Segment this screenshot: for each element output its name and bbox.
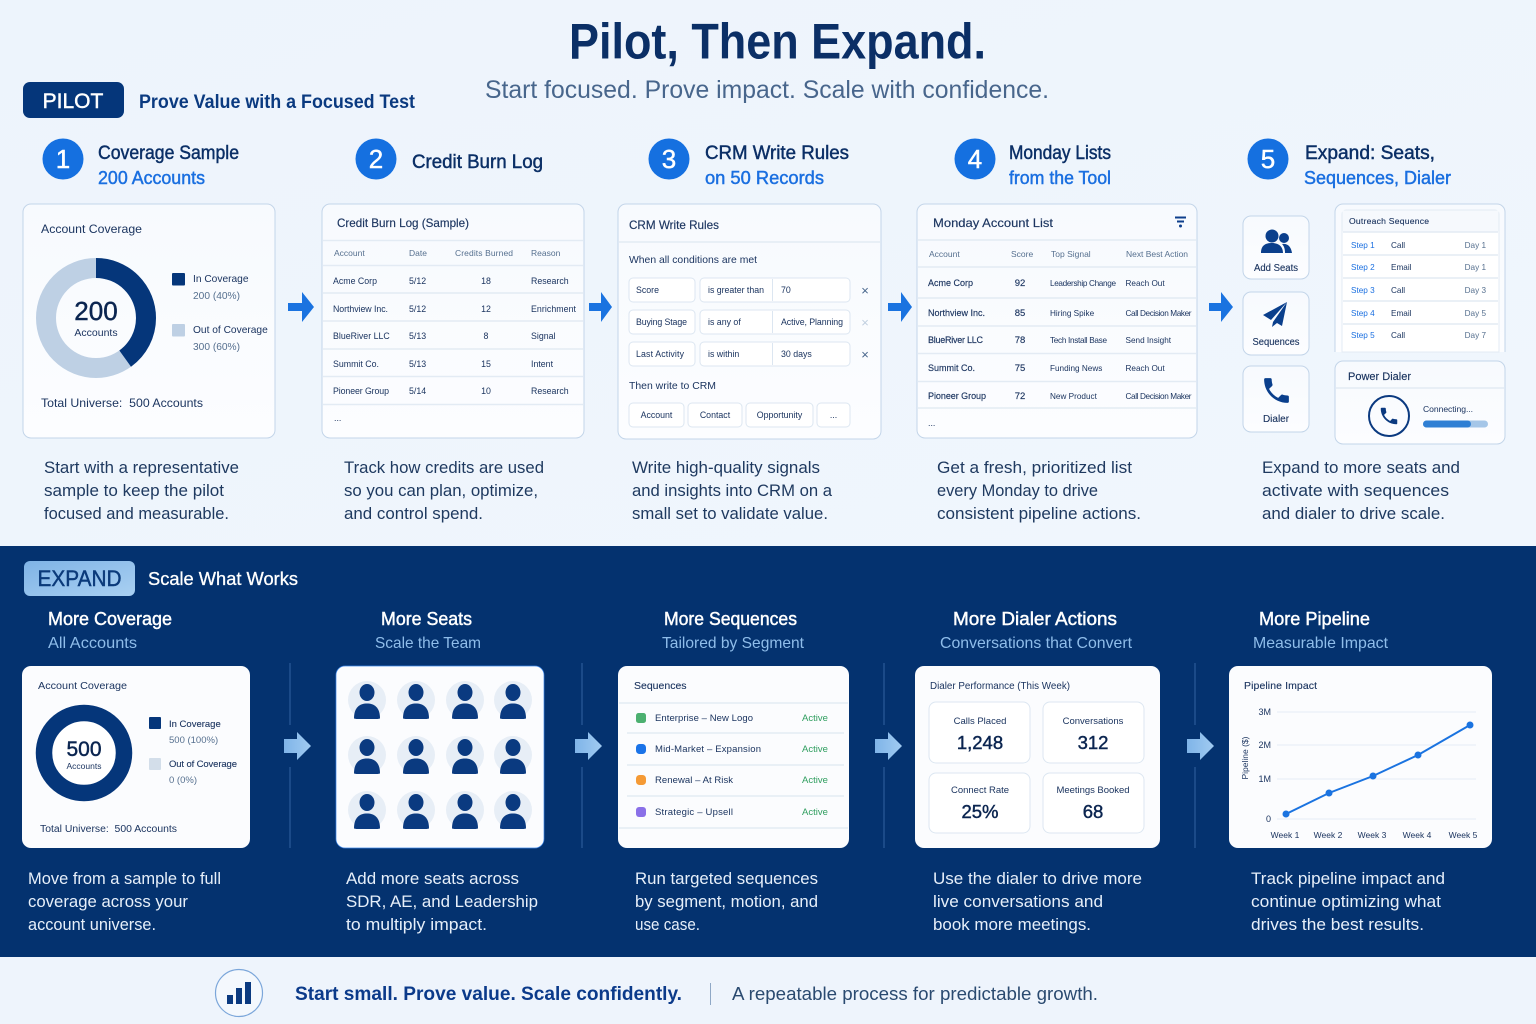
stat tile: conversations: Conversations xyxy=(1063,716,1124,727)
donut chart: 200 of 500 xyxy=(46,268,146,368)
panel: CRM write rules: Then write to CRM xyxy=(629,380,716,392)
text: step 1 description: focused and measurable. xyxy=(44,505,229,523)
panel: sequences list: Renewal – At Risk xyxy=(655,775,733,786)
panel: credit burn log table: Northview Inc. xyxy=(333,304,388,314)
column heading: more seats: More Seats xyxy=(381,608,472,629)
panel: seats grid xyxy=(336,666,544,848)
panel: power dialer: Connecting... xyxy=(1423,404,1473,414)
panel: credit burn log table: ... xyxy=(334,413,341,423)
panel: credit burn log table: 5/14 xyxy=(409,386,426,396)
line chart: Week 3 xyxy=(1358,830,1387,840)
column heading: more seats: Scale the Team xyxy=(375,635,481,652)
panel: credit burn log table: 5/13 xyxy=(409,359,426,369)
panel: Monday account list: Score xyxy=(1011,249,1033,259)
write target buttons: Opportunity xyxy=(757,410,803,420)
text: more dialer description: Use the dialer to drive more xyxy=(933,870,1142,888)
stat tile: connect rate xyxy=(929,773,1030,833)
card: add seats: Add Seats xyxy=(1254,263,1298,274)
panel: credit burn log table: 15 xyxy=(481,359,491,369)
expand section header: Scale What Works xyxy=(148,569,298,589)
arrow: expand 4 xyxy=(1187,732,1214,760)
legend: 500 (100%) xyxy=(169,735,218,746)
text: step 4 description: Get a fresh, prioritized list xyxy=(937,459,1132,477)
text: step 3 description xyxy=(632,459,833,523)
text: more pipeline description: drives the best results. xyxy=(1251,916,1424,934)
condition rows: × xyxy=(861,283,869,298)
stat tile: calls placed: 1,248 xyxy=(957,732,1003,753)
text: step 5 description xyxy=(1262,459,1460,523)
panel: credit burn log table: 5/13 xyxy=(409,331,426,341)
panel: credit burn log table: Intent xyxy=(531,359,554,369)
step 4 heading: Monday Lists xyxy=(1009,143,1111,164)
panel: Monday account list: Call Decision Maker xyxy=(1126,309,1192,318)
step 4 heading: 4 xyxy=(968,144,982,174)
text: more dialer description xyxy=(933,870,1142,934)
panel: pipeline impact: Pipeline Impact xyxy=(1244,680,1317,692)
text: more dialer description: book more meetings. xyxy=(933,916,1091,934)
text: more seats description: to multiply impact. xyxy=(346,916,487,934)
write target buttons: ... xyxy=(830,410,837,420)
column heading: more pipeline xyxy=(1253,608,1389,652)
step 3 heading: on 50 Records xyxy=(705,168,824,188)
panel: outreach sequence: Step 3 xyxy=(1351,286,1375,295)
column heading: more pipeline: Measurable Impact xyxy=(1253,635,1389,652)
panel: dialer performance: Dialer Performance (This Week) xyxy=(930,681,1070,692)
panel: credit burn log table: Reason xyxy=(531,248,561,258)
text: step 5 description: Expand to more seats and xyxy=(1262,459,1460,477)
legend: Out of Coverage xyxy=(193,325,268,336)
panel: outreach sequence: Call xyxy=(1391,241,1405,250)
panel: credit burn log table: 12 xyxy=(481,304,491,314)
footer tagline: Start small. Prove value. Scale confidently. xyxy=(295,983,682,1005)
text: more sequences description: Run targeted sequences xyxy=(635,870,818,888)
arrow: expand 2 xyxy=(575,732,602,760)
condition rows: is within xyxy=(708,349,739,359)
step 5 heading xyxy=(1248,138,1451,188)
panel: credit burn log table: 10 xyxy=(481,386,491,396)
arrow: expand 1 xyxy=(284,732,311,760)
panel: credit burn log table: Credits Burned xyxy=(455,248,513,258)
panel: outreach sequence: Step 4 xyxy=(1351,309,1375,318)
step 1 heading: 200 Accounts xyxy=(98,168,205,188)
panel: Monday account list: Tech Install Base xyxy=(1050,336,1107,345)
donut chart: 500 of 500: 500 xyxy=(66,738,102,761)
panel: full account coverage: Account Coverage xyxy=(38,681,127,692)
panel: Monday account list: BlueRiver LLC xyxy=(928,335,984,345)
panel: full account coverage xyxy=(22,666,250,848)
step 5 heading: 5 xyxy=(1261,144,1275,174)
text: more pipeline description xyxy=(1251,870,1445,934)
panel: outreach sequence: Day 7 xyxy=(1465,331,1486,340)
column heading: more seats xyxy=(375,608,481,652)
line chart: 3M xyxy=(1258,707,1271,717)
panel: power dialer xyxy=(1335,361,1505,444)
stat tile: calls placed xyxy=(929,702,1030,763)
text: step 2 description: and control spend. xyxy=(344,505,483,523)
panel: Monday account list: 72 xyxy=(1015,391,1025,402)
text: more coverage description: Move from a sample to full xyxy=(28,870,221,888)
column heading: more coverage: More Coverage xyxy=(48,608,172,629)
subtitle: Start focused. Prove impact. Scale with confidence. xyxy=(485,76,1049,104)
step 3 heading xyxy=(648,138,849,188)
legend: Out of Coverage xyxy=(169,759,237,770)
line chart: 2M xyxy=(1258,740,1271,750)
text: more seats description xyxy=(346,870,538,934)
panel: dialer performance xyxy=(915,666,1160,848)
pilot section header xyxy=(23,82,416,118)
text: step 4 description: consistent pipeline actions. xyxy=(937,505,1141,523)
legend: 0 (0%) xyxy=(169,775,197,786)
arrow 2 xyxy=(589,292,612,322)
text: step 4 description xyxy=(937,459,1141,523)
text: step 5 description: activate with sequences xyxy=(1262,482,1449,500)
text: more seats description: SDR, AE, and Leadership xyxy=(346,893,538,911)
title: Pilot, Then Expand. xyxy=(569,14,986,70)
panel: credit burn log table: Date xyxy=(409,248,427,258)
panel: account coverage sample: Total Universe: 500 Accounts xyxy=(41,396,203,410)
panel: Monday account list: Northview Inc. xyxy=(928,308,985,318)
panel: Monday account list: Monday Account List xyxy=(933,216,1054,230)
step 5 heading: Expand: Seats, xyxy=(1305,143,1435,164)
panel: credit burn log table: Research xyxy=(531,386,569,396)
column heading: more sequences xyxy=(662,608,805,652)
panel: credit burn log table: 5/12 xyxy=(409,276,426,286)
condition rows: is any of xyxy=(708,317,741,327)
condition rows: Active, Planning xyxy=(781,317,843,327)
panel: Monday account list: Hiring Spike xyxy=(1050,309,1095,318)
step 1 heading: Coverage Sample xyxy=(98,143,239,164)
panel: Monday account list: Send Insight xyxy=(1126,336,1172,345)
panel: outreach sequence: Day 5 xyxy=(1465,309,1486,318)
legend: In Coverage xyxy=(169,719,221,730)
stat tile: meetings booked: 68 xyxy=(1083,801,1103,822)
text: step 2 description: so you can plan, optimize, xyxy=(344,482,538,500)
panel: outreach sequence: Email xyxy=(1391,263,1412,272)
line chart: Week 4 xyxy=(1403,830,1432,840)
panel: credit burn log table: 8 xyxy=(484,331,489,341)
panel: full account coverage: Total Universe: 500 Accounts xyxy=(40,824,177,835)
text: step 2 description: Track how credits are used xyxy=(344,459,544,477)
card: sequences xyxy=(1243,292,1309,355)
panel: Monday account list: Reach Out xyxy=(1126,364,1165,373)
text: step 3 description: and insights into CRM on a xyxy=(632,482,833,500)
panel: credit burn log table: Enrichment xyxy=(531,304,577,314)
panel: Monday account list: New Product xyxy=(1050,392,1098,401)
text: more dialer description: live conversations and xyxy=(933,893,1103,911)
expand section header xyxy=(24,561,298,596)
arrow: expand 3 xyxy=(875,732,902,760)
panel: pipeline impact xyxy=(1229,666,1492,848)
condition rows: Last Activity xyxy=(636,349,685,359)
panel: credit burn log table: Research xyxy=(531,276,569,286)
text: more sequences description: use case. xyxy=(635,916,700,934)
text: more sequences description xyxy=(635,870,818,934)
line chart xyxy=(1240,707,1478,840)
panel: sequences list: Active xyxy=(802,807,828,818)
text: step 1 description: sample to keep the pilot xyxy=(44,482,224,500)
panel: account coverage sample: Account Coverage xyxy=(41,222,142,236)
stat tile: meetings booked xyxy=(1043,773,1144,833)
column heading: more sequences: More Sequences xyxy=(664,608,797,629)
column heading: more dialer actions: Conversations that Convert xyxy=(940,635,1133,652)
panel: outreach sequence: Step 2 xyxy=(1351,263,1375,272)
panel: outreach sequence: Step 5 xyxy=(1351,331,1375,340)
panel: credit burn log table: Account xyxy=(334,248,365,258)
condition rows: 70 xyxy=(781,285,791,295)
text: more coverage description: account universe. xyxy=(28,916,156,934)
footer band xyxy=(0,957,1536,1024)
column heading: more sequences: Tailored by Segment xyxy=(662,635,805,652)
panel: power dialer: Power Dialer xyxy=(1348,371,1411,383)
step 2 heading xyxy=(356,138,543,180)
panel: expand section background xyxy=(0,546,1536,957)
column heading: more pipeline: More Pipeline xyxy=(1259,608,1370,629)
panel: credit burn log table: Credit Burn Log (Sample) xyxy=(337,217,469,230)
stat tile: meetings booked: Meetings Booked xyxy=(1056,785,1130,796)
step 3 heading: CRM Write Rules xyxy=(705,143,849,164)
panel: Monday account list: Next Best Action xyxy=(1126,249,1188,259)
panel: Monday account list: 85 xyxy=(1015,308,1025,319)
icon: filter xyxy=(1175,218,1186,222)
text: more coverage description xyxy=(28,870,221,934)
text: step 1 description xyxy=(44,459,239,523)
column heading: more dialer actions xyxy=(940,608,1133,652)
panel: credit burn log table: Signal xyxy=(531,331,555,341)
step 1 heading xyxy=(42,138,239,188)
panel: outreach sequence: Call xyxy=(1391,286,1405,295)
text: more pipeline description: Track pipeline impact and xyxy=(1251,870,1445,888)
step 2 heading: Credit Burn Log xyxy=(412,152,543,173)
step 4 heading xyxy=(954,138,1111,188)
panel: sequences list: Active xyxy=(802,713,828,724)
panel: Monday account list: 75 xyxy=(1015,363,1025,374)
panel: sequences list: Active xyxy=(802,775,828,786)
condition rows: × xyxy=(861,347,869,362)
panel: credit burn log table xyxy=(322,204,584,438)
donut chart: 500 of 500: Accounts xyxy=(67,761,101,771)
panel: credit burn log table: Summit Co. xyxy=(333,359,379,369)
panel: credit burn log table: 5/12 xyxy=(409,304,426,314)
panel: Monday account list: Summit Co. xyxy=(928,363,975,373)
text: more seats description: Add more seats across xyxy=(346,870,519,888)
panel: credit burn log table: Acme Corp xyxy=(333,276,377,286)
panel: sequences list: Mid-Market – Expansion xyxy=(655,744,761,755)
line chart: Pipeline ($) xyxy=(1240,736,1250,780)
legend xyxy=(172,273,268,353)
condition rows: Score xyxy=(636,285,659,295)
legend: In Coverage xyxy=(193,274,249,285)
step 1 heading: 1 xyxy=(56,144,70,174)
panel: outreach sequence: Day 1 xyxy=(1465,241,1486,250)
text: step 5 description: and dialer to drive scale. xyxy=(1262,505,1445,523)
expand section header: EXPAND xyxy=(38,566,122,591)
page background xyxy=(0,0,1536,546)
panel: sequences list: Sequences xyxy=(634,680,687,692)
icon: bar chart badge xyxy=(216,970,262,1016)
text: more coverage description: coverage across your xyxy=(28,893,189,911)
card: add seats xyxy=(1243,216,1309,279)
panel: account coverage sample xyxy=(23,204,275,438)
donut chart: 200 of 500: 200 xyxy=(74,296,118,326)
step 4 heading: from the Tool xyxy=(1009,168,1111,188)
panel: outreach sequence: Day 3 xyxy=(1465,286,1486,295)
panel: Monday account list: Account xyxy=(929,249,960,259)
line chart: 0 xyxy=(1266,814,1271,824)
panel: outreach sequence: Call xyxy=(1391,331,1405,340)
panel: outreach sequence xyxy=(1335,204,1505,352)
panel: sequences list xyxy=(618,666,849,848)
column heading: more dialer actions: More Dialer Actions xyxy=(953,608,1117,629)
panel: Monday account list: Funding News xyxy=(1050,364,1102,373)
condition rows: is greater than xyxy=(708,285,764,295)
panel: Monday account list: Leadership Change xyxy=(1050,279,1116,288)
line chart: Week 2 xyxy=(1314,830,1343,840)
panel: Monday account list xyxy=(917,204,1197,438)
stat tile: conversations: 312 xyxy=(1078,732,1108,753)
text: step 4 description: every Monday to drive xyxy=(937,482,1098,500)
card: dialer xyxy=(1243,366,1309,432)
stat tile: calls placed: Calls Placed xyxy=(954,716,1006,727)
panel: credit burn log table: BlueRiver LLC xyxy=(333,331,390,341)
write target buttons xyxy=(629,403,850,427)
panel: credit burn log table: Pioneer Group xyxy=(333,386,389,396)
line chart: 1M xyxy=(1258,774,1271,784)
footer statement: A repeatable process for predictable growth. xyxy=(732,984,1098,1004)
panel: CRM write rules: When all conditions are met xyxy=(629,254,757,266)
step 3 heading: 3 xyxy=(662,144,676,174)
text: more pipeline description: continue optimizing what xyxy=(1251,893,1441,911)
condition rows xyxy=(629,278,869,366)
panel: Monday account list: 92 xyxy=(1015,278,1025,289)
pilot section header: PILOT xyxy=(43,90,104,113)
arrow 1 xyxy=(288,292,314,322)
legend xyxy=(149,717,237,786)
write target buttons: Contact xyxy=(700,410,731,420)
text: step 3 description: small set to validate value. xyxy=(632,505,828,523)
condition rows: 30 days xyxy=(781,349,812,359)
panel: CRM write rules xyxy=(618,204,881,439)
panel: outreach sequence: Day 1 xyxy=(1465,263,1486,272)
icon: seat avatars xyxy=(348,681,532,830)
donut chart: 200 of 500: Accounts xyxy=(74,327,118,339)
legend: 200 (40%) xyxy=(193,291,240,302)
column heading: more coverage: All Accounts xyxy=(48,635,137,652)
pilot section header: Prove Value with a Focused Test xyxy=(139,92,416,113)
panel: Monday account list: Acme Corp xyxy=(928,278,973,288)
donut chart: 500 of 500 xyxy=(44,713,124,793)
text: step 1 description: Start with a representative xyxy=(44,459,239,477)
legend: 300 (60%) xyxy=(193,342,240,353)
panel: sequences list: Enterprise – New Logo xyxy=(655,713,753,724)
panel: sequences list: Strategic – Upsell xyxy=(655,807,733,818)
panel: Monday account list: ... xyxy=(928,418,935,428)
text: step 2 description xyxy=(344,459,544,523)
step 5 heading: Sequences, Dialer xyxy=(1304,168,1451,188)
panel: credit burn log table: 18 xyxy=(481,276,491,286)
arrow 4 xyxy=(1209,292,1233,322)
panel: Monday account list: 78 xyxy=(1015,335,1025,346)
card: sequences: Sequences xyxy=(1252,337,1300,348)
step 2 heading: 2 xyxy=(369,144,383,174)
panel: CRM write rules: CRM Write Rules xyxy=(629,218,719,232)
stat tile: connect rate: 25% xyxy=(961,801,999,822)
panel: Monday account list: Reach Out xyxy=(1126,279,1165,288)
panel: Monday account list: Pioneer Group xyxy=(928,391,986,401)
panel: outreach sequence: Outreach Sequence xyxy=(1349,216,1429,226)
panel: outreach sequence: Step 1 xyxy=(1351,241,1375,250)
panel: Monday account list: Top Signal xyxy=(1051,249,1091,259)
panel: outreach sequence: Email xyxy=(1391,309,1412,318)
text: step 3 description: Write high-quality signals xyxy=(632,459,820,477)
arrow 3 xyxy=(888,292,912,322)
condition rows: × xyxy=(861,315,869,330)
panel: Monday account list: Call Decision Maker xyxy=(1126,392,1192,401)
write target buttons: Account xyxy=(641,410,673,420)
panel: sequences list: Active xyxy=(802,744,828,755)
condition rows: Buying Stage xyxy=(636,317,687,327)
card: dialer: Dialer xyxy=(1263,414,1290,425)
stat tile: conversations xyxy=(1043,702,1144,763)
line chart: Week 5 xyxy=(1449,830,1478,840)
stat tile: connect rate: Connect Rate xyxy=(951,785,1009,796)
text: more sequences description: by segment, motion, and xyxy=(635,893,818,911)
column heading: more coverage xyxy=(48,608,172,652)
line chart: Week 1 xyxy=(1271,830,1300,840)
